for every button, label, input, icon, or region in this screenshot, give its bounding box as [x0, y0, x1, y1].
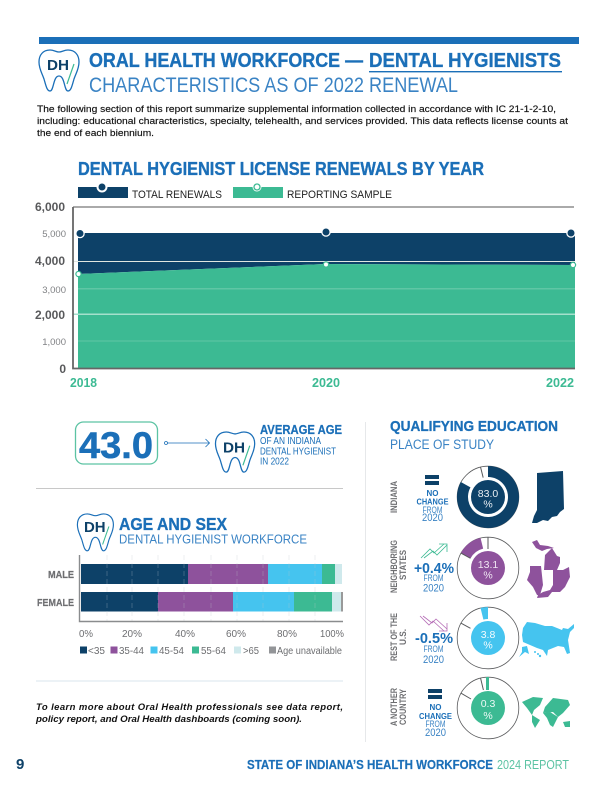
- icon: tooth DH: [77, 514, 113, 551]
- subtitle: CHARACTERISTICS AS OF 2022 RENEWAL: [89, 73, 458, 97]
- y axis labels: 5,000: [42, 229, 66, 240]
- page number: 9: [16, 756, 24, 773]
- map: United States: [519, 622, 574, 657]
- change: +0.4%: [414, 560, 454, 594]
- footer: STATE OF INDIANA’S HEALTH WORKFORCE: [247, 758, 493, 772]
- change: -0.5%: [415, 630, 453, 666]
- row label: INDIANA: [389, 481, 399, 513]
- y axis labels: [35, 200, 66, 376]
- donut: 0.3%: 0.3: [481, 698, 495, 710]
- change: -0.5%: -0.5%: [415, 630, 453, 647]
- donut: 13.1%: 13.1: [478, 559, 498, 571]
- icon: tooth DH: DH: [84, 520, 106, 536]
- x axis years: 2022: [546, 375, 574, 390]
- y axis labels: 1,000: [42, 337, 66, 348]
- age legend: Age unavailable: [277, 646, 342, 657]
- row label: COUNTRY: [398, 689, 408, 725]
- change: no change: CHANGE: [416, 496, 449, 506]
- category labels: MALE: [48, 570, 74, 581]
- average age text: OF AN INDIANA: [260, 436, 321, 447]
- note: To learn more about Oral Health professionals see data report,: [36, 702, 343, 713]
- title: DENTAL HYGIENISTS: [369, 50, 561, 72]
- title: ORAL HEALTH WORKFORCE —: [89, 50, 363, 72]
- change: no change: [416, 475, 449, 524]
- note: [35, 702, 343, 725]
- age and sex heading: DENTAL HYGIENIST WORKFORCE: [119, 532, 307, 546]
- percent axis labels: 80%: [277, 629, 297, 640]
- donut: 83.0%: 83.0: [478, 488, 498, 500]
- icon: trend down arrow: [420, 616, 447, 631]
- change: -0.5%: 2020: [423, 654, 444, 666]
- female bar: [81, 592, 343, 612]
- icon: tooth DH: [39, 50, 79, 91]
- stacked bar chart: age and sex: [37, 555, 344, 657]
- chart heading: DENTAL HYGIENIST LICENSE RENEWALS BY YEAR: [78, 159, 484, 179]
- age legend: 35-44: [119, 646, 144, 657]
- icon: tooth DH: DH: [47, 57, 69, 74]
- x axis years: 2020: [312, 375, 340, 390]
- y axis labels: 0: [59, 362, 66, 376]
- change: +0.4%: 2020: [423, 582, 444, 594]
- big number: 43.0: [79, 425, 153, 466]
- age legend: 45-54: [159, 646, 184, 657]
- average age text: [260, 422, 342, 468]
- percent axis labels: 100%: [320, 629, 344, 640]
- row: rest of the U.S.: [389, 607, 574, 669]
- row label: REST OF THE: [389, 613, 399, 661]
- header: [37, 50, 569, 138]
- chart legend: TOTAL RENEWALS: [132, 189, 222, 201]
- intro paragraph: the end of each biennium.: [37, 128, 154, 138]
- intro paragraph: [37, 104, 569, 138]
- change: +0.4%: FROM: [424, 573, 444, 583]
- row label: U.S.: [398, 629, 408, 645]
- percent axis labels: 20%: [122, 629, 142, 640]
- row: another country: [389, 677, 570, 739]
- donut: 3.8%: 3.8: [481, 629, 495, 641]
- map: Indiana: [532, 471, 564, 523]
- map: world: [522, 697, 570, 728]
- percent axis labels: 40%: [175, 629, 195, 640]
- note: policy report, and Oral Health dashboards (coming soon).: [35, 714, 302, 725]
- qualifying education heading: [390, 418, 558, 452]
- chart legend: [78, 182, 392, 201]
- row label: [389, 613, 408, 661]
- percent axis labels: 0%: [79, 629, 93, 640]
- age legend: <35: [88, 646, 105, 657]
- title: [89, 50, 562, 72]
- percent axis labels: [79, 629, 344, 640]
- row label: A NOTHER: [389, 688, 399, 726]
- arrow: [164, 439, 210, 447]
- age legend: 55-64: [201, 646, 226, 657]
- row: Indiana: [389, 466, 564, 528]
- age legend: >65: [243, 646, 259, 657]
- change: no change: FROM: [426, 719, 446, 729]
- age and sex heading: AGE AND SEX: [119, 514, 227, 534]
- donut: 0.3%: %: [483, 710, 493, 722]
- donut: 83.0%: %: [483, 498, 493, 510]
- change: -0.5%: FROM: [424, 644, 444, 654]
- average age callout: [76, 422, 342, 472]
- icon: trend up arrow: [421, 544, 447, 558]
- donut: 13.1%: [457, 537, 519, 599]
- change: no change: [419, 689, 452, 739]
- donut: 3.8%: [457, 607, 519, 669]
- y axis labels: 2,000: [35, 308, 65, 322]
- row: neighboring states: [389, 537, 570, 599]
- row label: [389, 540, 408, 593]
- chart legend: REPORTING SAMPLE: [287, 189, 392, 201]
- change: no change: FROM: [422, 505, 442, 515]
- y axis labels: 4,000: [35, 254, 65, 268]
- category labels: [37, 570, 74, 609]
- area chart: renewals by year: [35, 200, 576, 390]
- average age text: DENTAL HYGIENIST: [260, 446, 336, 458]
- icon: tooth DH: [215, 432, 255, 472]
- donut: 3.8%: %: [483, 640, 493, 652]
- y axis labels: 3,000: [42, 285, 66, 296]
- intro paragraph: The following section of this report summarize supplemental information collected in accordance with IC 21-1-2-10,: [37, 104, 556, 114]
- donut: 83.0%: [457, 466, 519, 528]
- row label: [389, 688, 408, 726]
- age legend: [80, 646, 342, 657]
- category labels: FEMALE: [37, 598, 74, 609]
- data markers: [75, 227, 576, 277]
- intro paragraph: including: educational characteristics, specialty, telehealth, and services provided. This data reflects license counts at: [37, 116, 569, 126]
- male bar: [81, 564, 342, 584]
- change: +0.4%: +0.4%: [414, 560, 454, 577]
- change: no change: CHANGE: [419, 711, 452, 721]
- x axis years: 2018: [70, 375, 97, 390]
- row label: NEIGHBORING: [389, 540, 399, 593]
- donut: 13.1%: %: [483, 570, 493, 582]
- donut: 0.3%: [457, 677, 519, 739]
- percent axis labels: 60%: [226, 629, 246, 640]
- footer: 2024 REPORT: [497, 758, 569, 772]
- icon: tooth DH: DH: [223, 440, 245, 457]
- qualifying education heading: QUALIFYING EDUCATION: [390, 418, 558, 435]
- average age text: AVERAGE AGE: [260, 422, 342, 437]
- average age text: IN 2022: [260, 456, 289, 468]
- map: neighboring states: [527, 540, 570, 598]
- x axis years: [70, 375, 574, 390]
- row label: STATES: [398, 550, 408, 580]
- change: no change: 2020: [422, 512, 443, 524]
- change: no change: NO: [426, 488, 439, 498]
- change: no change: NO: [430, 702, 442, 712]
- y axis labels: 6,000: [35, 200, 65, 214]
- qualifying education heading: PLACE OF STUDY: [390, 437, 494, 452]
- change: no change: 2020: [425, 727, 446, 739]
- age and sex heading: [77, 514, 307, 551]
